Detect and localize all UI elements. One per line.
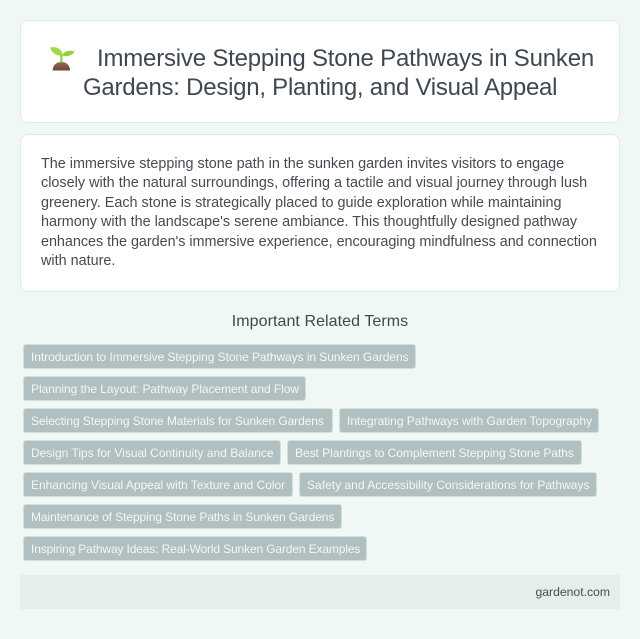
description text: closely with the natural surroundings, offering a tactile and visual journey through lush — [41, 175, 587, 191]
description text: harmony with the landscape's serene ambiance. This thoughtfully designed pathway — [41, 214, 577, 230]
tag: Safety and Accessibility Considerations for Pathways — [307, 478, 590, 492]
description text — [41, 156, 597, 269]
tag: Inspiring Pathway Ideas: Real-World Sunken Garden Examples — [31, 542, 360, 556]
footer site name: gardenot.com — [535, 585, 610, 599]
description text: The immersive stepping stone path in the sunken garden invites visitors to engage — [41, 156, 564, 172]
tag — [23, 376, 306, 401]
tag: Integrating Pathways with Garden Topography — [347, 414, 592, 428]
tag — [23, 472, 293, 497]
tag: Selecting Stepping Stone Materials for Sunken Gardens — [31, 414, 324, 428]
tag: Best Plantings to Complement Stepping Stone Paths — [295, 446, 574, 460]
tag — [23, 536, 367, 561]
tag: Design Tips for Visual Continuity and Balance — [31, 446, 274, 460]
tag — [23, 504, 342, 529]
tag — [287, 440, 582, 465]
tag — [299, 472, 597, 497]
tag — [339, 408, 599, 433]
panel: description card — [20, 134, 620, 292]
tag — [23, 440, 281, 465]
description text: with nature. — [41, 253, 115, 269]
icon: seedling — [50, 47, 74, 70]
title line 2: Gardens: Design, Planting, and Visual Appeal — [83, 74, 557, 101]
tag: Maintenance of Stepping Stone Paths in Sunken Gardens — [31, 510, 334, 524]
panel: title card — [20, 20, 620, 123]
heading: important related terms: Important Related Terms — [232, 313, 408, 330]
footer bar — [20, 575, 620, 609]
title line 1: Immersive Stepping Stone Pathways in Sunken — [97, 45, 594, 72]
tag: Enhancing Visual Appeal with Texture and Color — [31, 478, 285, 492]
tag — [23, 344, 416, 369]
tag: Introduction to Immersive Stepping Stone Pathways in Sunken Gardens — [31, 350, 409, 364]
tag — [23, 408, 333, 433]
tag: Planning the Layout: Pathway Placement and Flow — [31, 382, 299, 396]
description text: greenery. Each stone is strategically placed to guide exploration while maintaining — [41, 195, 562, 211]
tag list — [23, 344, 599, 561]
description text: enhances the garden's immersive experience, encouraging mindfulness and connection — [41, 234, 597, 250]
